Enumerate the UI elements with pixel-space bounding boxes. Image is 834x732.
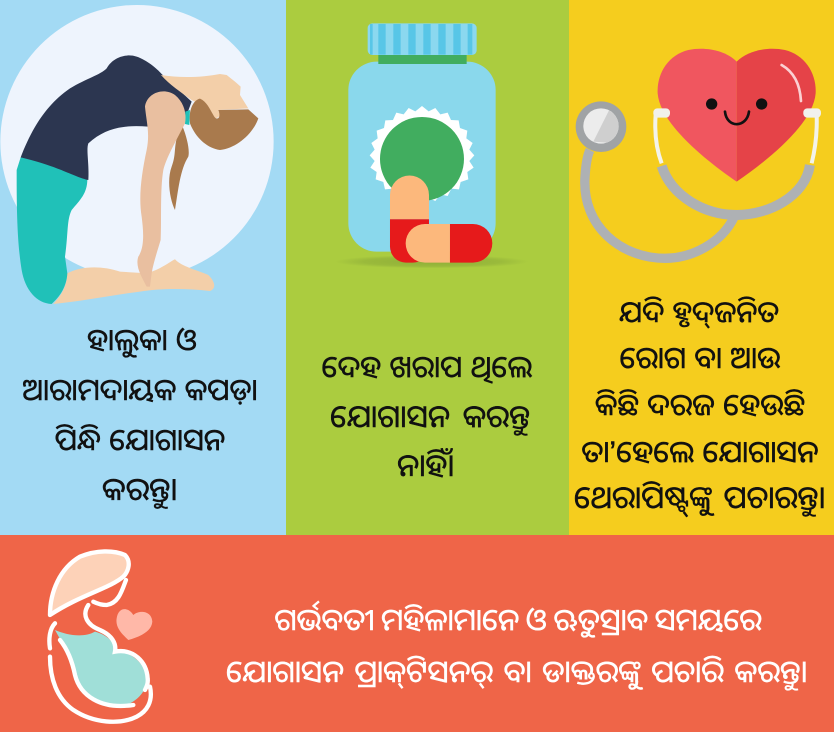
icon: medicine bottle and capsules	[335, 23, 528, 268]
text: do not practise if unwell: ନାହିଁ।	[397, 448, 455, 483]
text: light comfortable clothes: ହାଲୁକା ଓ	[87, 324, 197, 358]
text: consult a practitioner or doctor	[226, 600, 808, 691]
text: do not practise if unwell	[322, 351, 532, 483]
text: light comfortable clothes: ଆରାମଦାୟକ କପଡ଼ା	[22, 374, 258, 407]
text: heart disease consult therapist: ରୋଗ ବା ଆଉ	[619, 342, 781, 375]
panel: yoga clothing advice	[0, 0, 286, 535]
panel: heart condition advice	[569, 0, 834, 535]
icon: pregnant woman with heart	[49, 551, 152, 722]
text: heart disease consult therapist: ତା’ହେଲେ ଯୋଗାସନ	[581, 436, 819, 469]
panel: pregnancy and menstruation advice	[0, 535, 834, 732]
text: heart disease consult therapist: ଯଦି ହୃଦ୍‌ଜନିତ	[619, 296, 779, 329]
panel: do not practise when unwell	[286, 0, 569, 535]
text: do not practise if unwell: ଦେହ ଖରାପ ଥିଲେ	[322, 351, 532, 384]
text: consult a practitioner or doctor: ଗର୍ଭବତୀ ମହିଳାମାନେ ଓ ଋତୁସ୍ରାବ ସମୟରେ	[274, 600, 762, 638]
text: heart disease consult therapist	[574, 296, 826, 518]
text: do not practise if unwell: ଯୋଗାସନ କରନ୍ତୁ	[330, 399, 530, 436]
text: consult a practitioner or doctor: ଯୋଗାସନ ପ୍ରାକ୍‌ଟିସନର୍‌ ବା ଡାକ୍ତରଙ୍କୁ ପଚାରି କରନ୍ତୁ।	[226, 655, 808, 691]
text: light comfortable clothes: ପିନ୍ଧି ଯୋଗାସନ	[55, 424, 225, 457]
text: light comfortable clothes: କରନ୍ତୁ।	[102, 471, 178, 509]
text: light comfortable clothes	[22, 324, 258, 509]
text: heart disease consult therapist: କିଛି ଦରଜ ହେଉଛି	[595, 389, 805, 422]
icon: yoga camel pose	[0, 5, 274, 304]
icon: heart with stethoscope	[576, 49, 821, 258]
text: heart disease consult therapist: ଥେରାପିଷ୍ଟ୍‌ଙ୍କୁ ପଚାରନ୍ତୁ।	[574, 480, 826, 518]
